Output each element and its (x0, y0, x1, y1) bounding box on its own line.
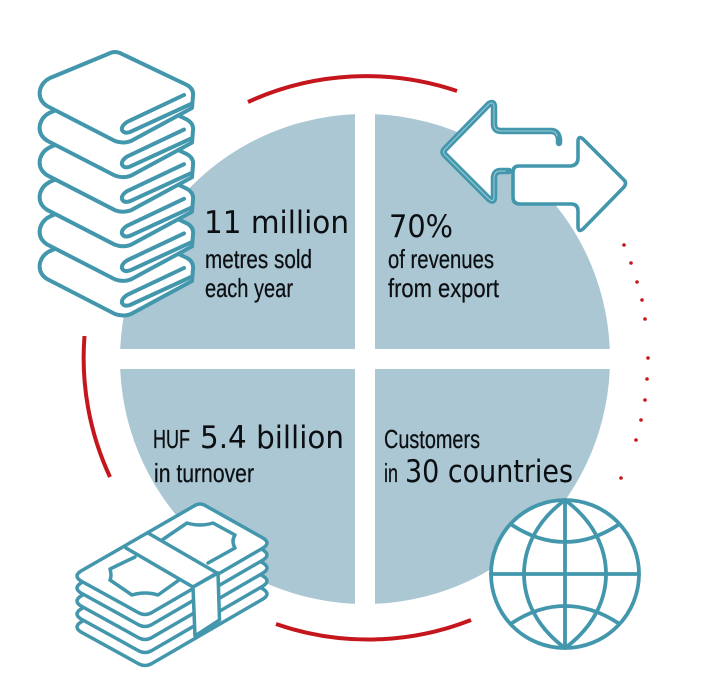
red arc: top (248, 76, 457, 102)
text: 11 million metres sold each year (204, 205, 349, 303)
text: 70% of revenues from export: of revenues (388, 244, 494, 274)
text: HUF 5.4 billion in turnover: HUF (153, 424, 190, 454)
icon: globe (491, 500, 639, 648)
icon: bundle of banknotes (77, 504, 267, 666)
text: Customers in 30 countries: Customers (384, 424, 480, 454)
red arc: left (84, 336, 110, 477)
text: HUF 5.4 billion in turnover (153, 420, 344, 488)
text: HUF 5.4 billion in turnover: in turnover (154, 458, 254, 488)
text: 70% of revenues from export (388, 209, 500, 303)
text: Customers in 30 countries: 30 countries (405, 454, 573, 490)
red arc: bottom (276, 620, 471, 640)
text: HUF 5.4 billion in turnover: 5.4 billion (200, 420, 344, 456)
text: 70% of revenues from export: from export (388, 273, 500, 303)
text: 11 million metres sold each year: 11 million (204, 205, 349, 241)
text: 70% of revenues from export: 70% (389, 209, 453, 245)
text: Customers in 30 countries (384, 424, 573, 490)
icon: export arrows (444, 103, 626, 230)
text: Customers in 30 countries: in (384, 458, 398, 488)
text: 11 million metres sold each year: each year (205, 273, 293, 303)
icon: stack of fabric (40, 52, 193, 316)
panel: quartered circle (115, 110, 615, 609)
red dotted arc: right (619, 243, 650, 480)
text: 11 million metres sold each year: metres sold (205, 244, 312, 274)
